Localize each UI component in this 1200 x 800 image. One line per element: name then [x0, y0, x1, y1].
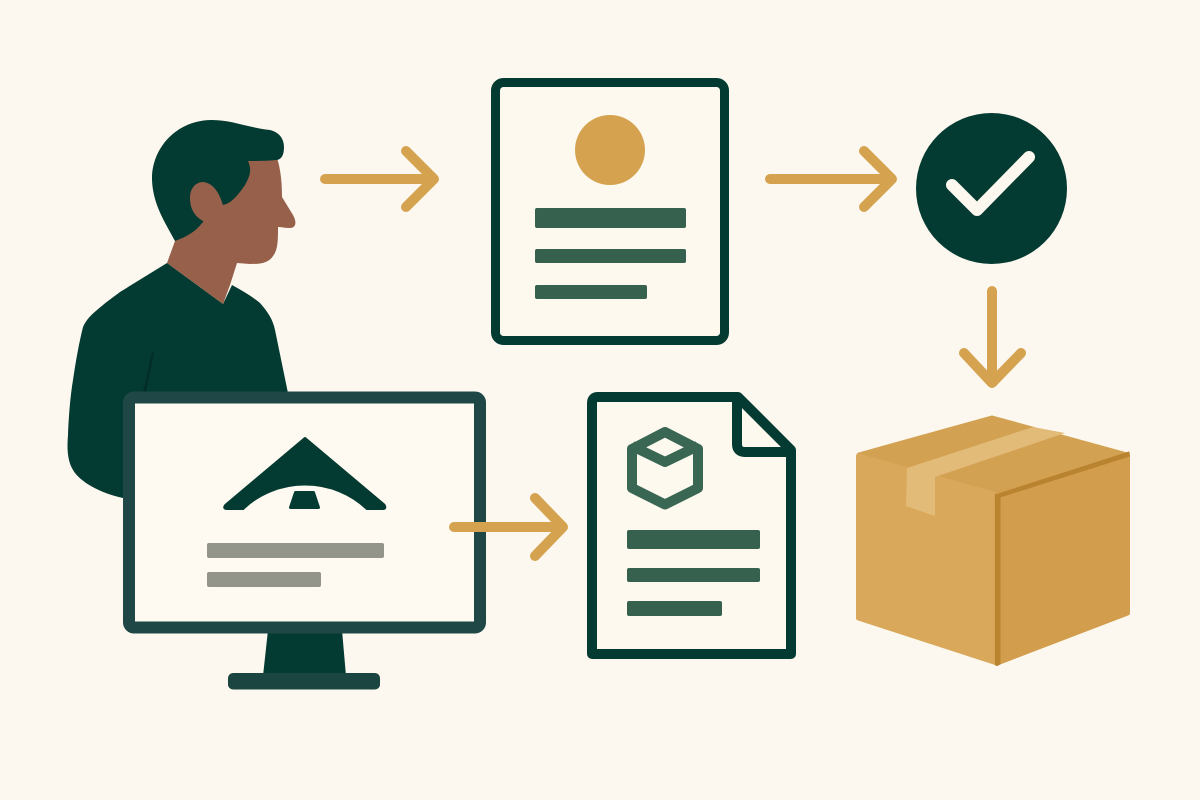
- screen text line 2: [207, 572, 321, 587]
- box left face: [858, 456, 997, 663]
- document text line 1: [627, 530, 760, 549]
- panel: profile card: [496, 82, 724, 340]
- person body: [68, 263, 289, 520]
- card outline: [496, 82, 724, 340]
- document outline: [592, 397, 791, 654]
- arrow: monitor to document: [454, 498, 563, 556]
- person ear: [190, 182, 223, 223]
- panel: document: [592, 397, 791, 654]
- document package icon: [632, 432, 698, 504]
- document corner fold: [737, 397, 791, 452]
- monitor screen frame: [129, 398, 480, 628]
- icon: person in profile: [68, 120, 295, 520]
- arrow: card to check mark: [770, 151, 892, 207]
- monitor stand: [263, 630, 346, 676]
- icon: desktop monitor: [129, 398, 480, 690]
- check mark: [952, 157, 1029, 210]
- person neck and face: [167, 158, 295, 304]
- box right face: [997, 456, 1128, 663]
- box top face: [859, 418, 1127, 494]
- document text line 3: [627, 601, 722, 616]
- card text line 2: [535, 249, 686, 263]
- icon: check mark badge: [916, 113, 1067, 264]
- card avatar circle: [575, 115, 645, 185]
- box tape: [906, 427, 1065, 516]
- badge circle: [916, 113, 1067, 264]
- screen logo roof: [225, 438, 385, 508]
- card text line 1: [535, 208, 686, 228]
- screen logo trapezoid: [290, 492, 318, 508]
- person sleeve crease: [143, 352, 154, 392]
- arrow: check mark to package: [964, 291, 1021, 383]
- person hair: [152, 120, 284, 241]
- screen text line 1: [207, 543, 384, 558]
- document text line 2: [627, 568, 760, 582]
- box dark edge: [996, 452, 1130, 666]
- card text line 3: [535, 285, 647, 299]
- monitor base: [228, 673, 380, 690]
- arrow: person to profile card: [325, 151, 434, 207]
- icon: cardboard box: [858, 418, 1130, 666]
